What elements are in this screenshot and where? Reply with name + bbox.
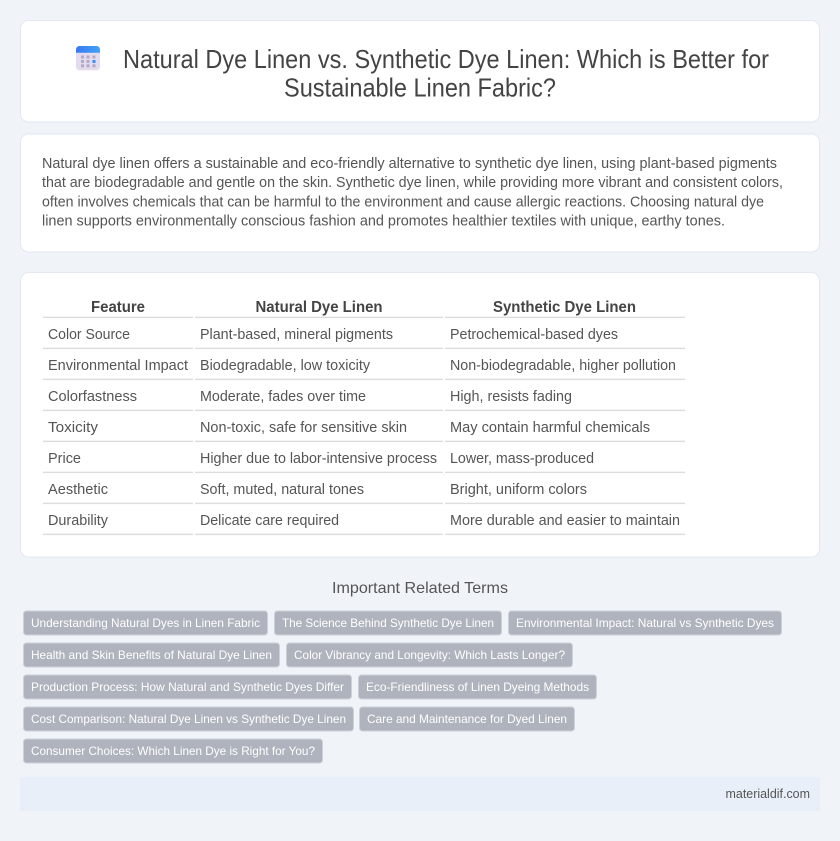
title: Natural Dye Linen vs. Synthetic Dye Linen: Which is Better for <box>123 46 769 74</box>
icon: calendar <box>76 46 100 70</box>
panel: comparison table <box>20 272 820 557</box>
intro paragraph: linen supports environmentally conscious fashion and promotes healthier textiles with unique, earthy tones. <box>42 214 725 230</box>
tag list <box>24 611 782 763</box>
table header: Natural Dye Linen <box>256 299 382 316</box>
table header: Synthetic Dye Linen <box>493 299 636 316</box>
row: colorfastness: High, resists fading <box>450 389 572 405</box>
panel: introduction <box>20 134 820 252</box>
row: color source: Color Source <box>48 327 130 343</box>
tag 5 <box>286 643 572 667</box>
row: price: Price <box>48 451 81 467</box>
title <box>123 46 769 102</box>
row: colorfastness: Colorfastness <box>48 389 137 405</box>
row: toxicity: May contain harmful chemicals <box>450 420 650 436</box>
tag 3: Environmental Impact: Natural vs Synthetic Dyes <box>516 616 774 630</box>
row: toxicity <box>48 420 650 436</box>
tag 8: Cost Comparison: Natural Dye Linen vs Synthetic Dye Linen <box>31 712 346 726</box>
tag 10: Consumer Choices: Which Linen Dye is Right for You? <box>31 744 315 758</box>
row: durability: Durability <box>48 513 109 529</box>
row: colorfastness: Moderate, fades over time <box>200 389 366 405</box>
table header: Feature <box>91 299 145 316</box>
tag 7 <box>358 675 596 699</box>
row: color source: Petrochemical-based dyes <box>450 327 618 343</box>
row: aesthetic: Bright, uniform colors <box>450 482 587 498</box>
row: colorfastness <box>48 389 572 405</box>
tag 8 <box>24 707 354 731</box>
row: durability <box>48 513 680 529</box>
intro paragraph <box>42 156 783 230</box>
tag 6: Production Process: How Natural and Synthetic Dyes Differ <box>31 680 344 694</box>
table rules <box>43 317 685 535</box>
intro paragraph: Natural dye linen offers a sustainable and eco-friendly alternative to synthetic dye linen, using plant-based pigments <box>42 156 777 172</box>
tag 2: The Science Behind Synthetic Dye Linen <box>282 616 494 630</box>
title: Sustainable Linen Fabric? <box>284 74 556 102</box>
row: price: Higher due to labor-intensive process <box>200 451 437 467</box>
heading: related terms: Important Related Terms <box>332 580 508 597</box>
table header <box>91 299 636 316</box>
row: toxicity: Non-toxic, safe for sensitive skin <box>200 420 407 436</box>
row: durability: Delicate care required <box>200 513 339 529</box>
tag 5: Color Vibrancy and Longevity: Which Lasts Longer? <box>294 648 565 662</box>
footer credit: materialdif.com <box>726 786 810 801</box>
tag 1 <box>24 611 268 635</box>
row: toxicity: Toxicity <box>48 420 99 436</box>
tag 2 <box>274 611 502 635</box>
intro paragraph: often involves chemicals that can be harmful to the environment and cause allergic reactions. Choosing natural dye <box>42 194 764 210</box>
row: color source: Plant-based, mineral pigments <box>200 327 393 343</box>
row: price: Lower, mass-produced <box>450 451 594 467</box>
tag 10 <box>24 739 322 763</box>
row: aesthetic: Soft, muted, natural tones <box>200 482 364 498</box>
tag 9 <box>360 707 574 731</box>
intro paragraph: that are biodegradable and gentle on the skin. Synthetic dye linen, while providing more vibrant and consistent colors, <box>42 175 783 191</box>
footer bar <box>20 777 820 811</box>
row: environmental impact: Biodegradable, low toxicity <box>200 358 371 374</box>
row: price <box>48 451 594 467</box>
row: durability: More durable and easier to maintain <box>450 513 680 529</box>
panel: title header <box>20 20 820 122</box>
row: aesthetic: Aesthetic <box>48 482 108 498</box>
tag 6 <box>24 675 352 699</box>
tag 4: Health and Skin Benefits of Natural Dye Linen <box>31 648 272 662</box>
tag 9: Care and Maintenance for Dyed Linen <box>367 712 567 726</box>
tag 3 <box>508 611 782 635</box>
tag 7: Eco-Friendliness of Linen Dyeing Methods <box>366 680 589 694</box>
tag 4 <box>24 643 280 667</box>
row: environmental impact <box>48 358 676 374</box>
row: color source <box>48 327 618 343</box>
row: environmental impact: Environmental Impact <box>48 358 188 374</box>
row: aesthetic <box>48 482 587 498</box>
tag 1: Understanding Natural Dyes in Linen Fabric <box>31 616 260 630</box>
row: environmental impact: Non-biodegradable, higher pollution <box>450 358 676 374</box>
